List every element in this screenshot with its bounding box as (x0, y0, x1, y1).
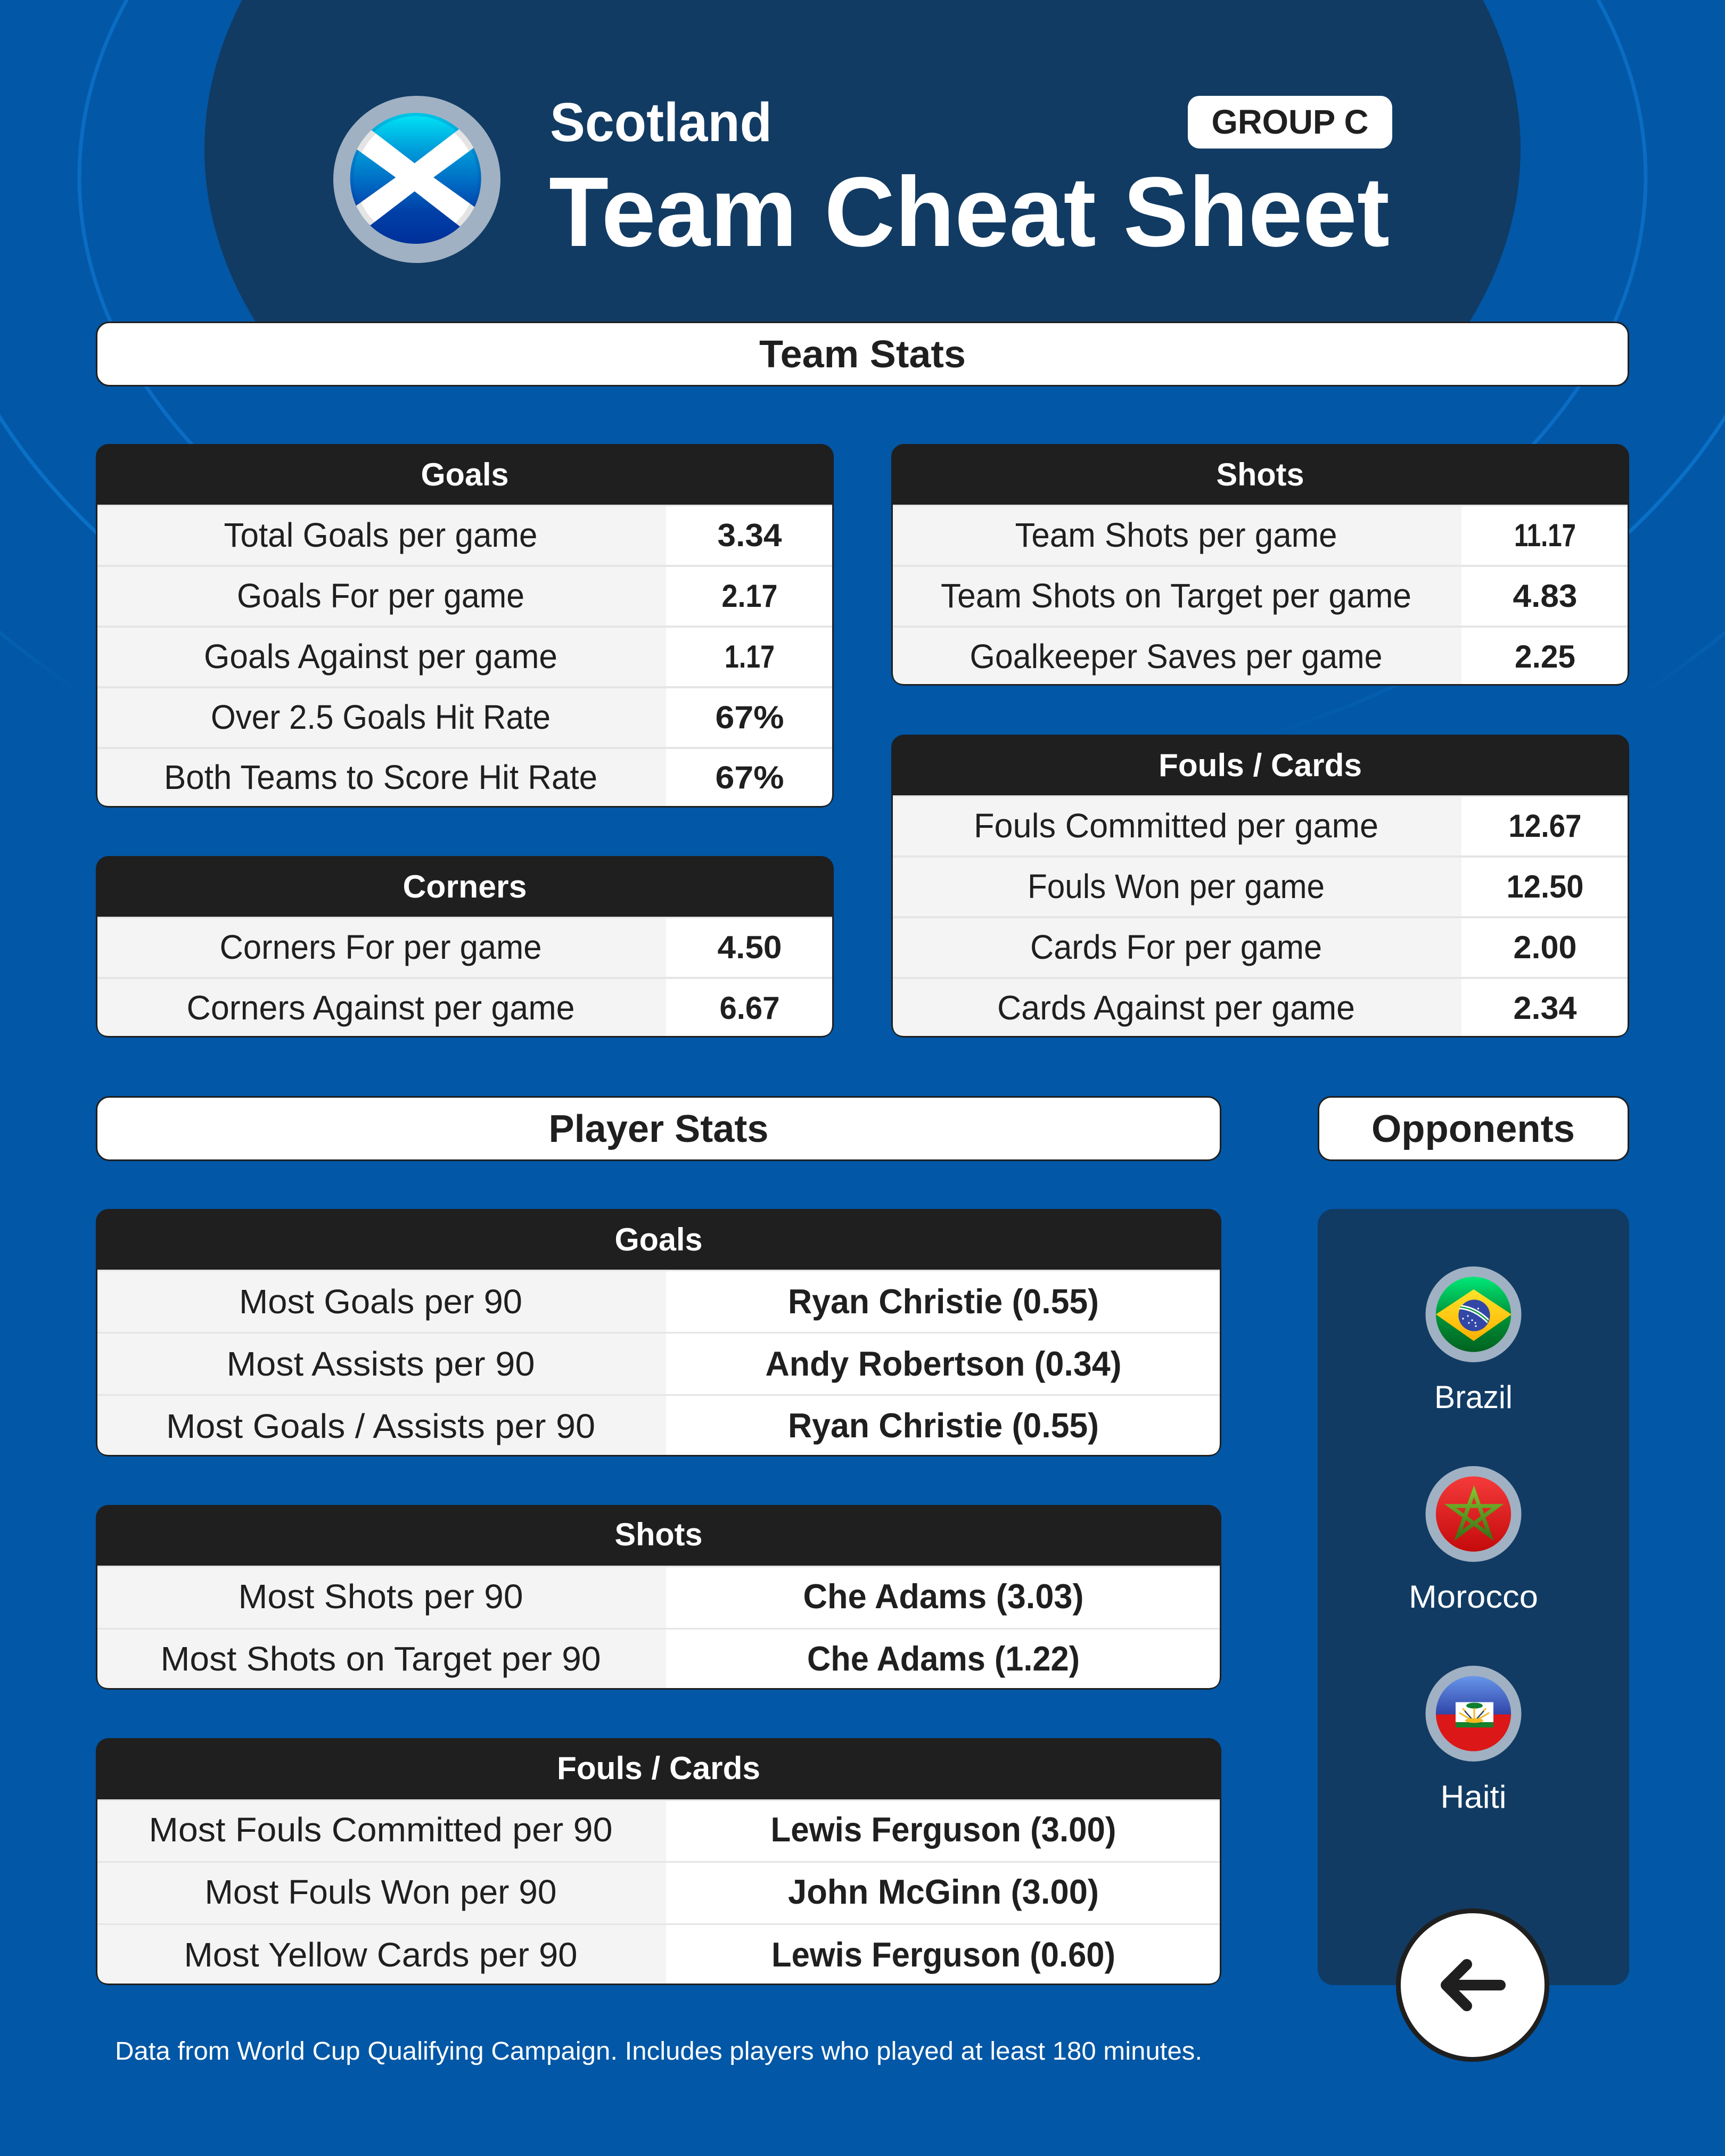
row (1028, 867, 1583, 906)
row: Ryan Christie (0.55) (788, 1282, 1099, 1321)
row: 2.00 (1513, 929, 1577, 965)
heading: Fouls / Cards (1159, 747, 1362, 783)
row (211, 698, 784, 736)
row (149, 1810, 1116, 1849)
row (219, 928, 782, 966)
row: 4.83 (1513, 578, 1577, 614)
icon: Morocco flag (1426, 1466, 1522, 1562)
row: Lewis Ferguson (0.60) (771, 1935, 1115, 1974)
icon: back arrow button (1398, 1911, 1547, 2059)
row: John McGinn (3.00) (788, 1872, 1099, 1911)
row: Team Shots on Target per game (941, 577, 1411, 615)
icon: Brazil flag (1426, 1266, 1522, 1362)
row: Cards For per game (1030, 928, 1322, 966)
row: 1.17 (725, 639, 775, 674)
row: Corners Against per game (186, 989, 575, 1027)
row (1030, 928, 1577, 966)
background rings (0, 0, 1725, 907)
section heading: Team Stats (97, 323, 1628, 385)
panel: player shots (96, 1505, 1221, 1690)
panel: opponents (1318, 1209, 1629, 1985)
icon: Scotland flag badge (333, 96, 500, 263)
row (166, 1406, 1099, 1445)
row: 12.67 (1509, 808, 1581, 844)
row: Most Shots per 90 (239, 1577, 523, 1616)
row: Team Shots per game (1015, 516, 1337, 554)
row: Over 2.5 Goals Hit Rate (211, 698, 551, 736)
row: Goalkeeper Saves per game (970, 637, 1382, 676)
row (204, 637, 775, 676)
row: Lewis Ferguson (3.00) (771, 1810, 1116, 1849)
row: 67% (716, 700, 784, 735)
row: 3.34 (718, 517, 782, 553)
row (186, 989, 779, 1027)
row (161, 1639, 1080, 1678)
header backdrop ellipse (204, 0, 1521, 322)
row: 67% (716, 760, 784, 795)
row: Fouls Committed per game (974, 807, 1378, 845)
row: Most Yellow Cards per 90 (184, 1936, 577, 1974)
row (974, 807, 1581, 845)
row (1015, 516, 1576, 554)
section heading: Opponents: Opponents (1371, 1108, 1575, 1150)
panel: player fouls and cards (96, 1738, 1221, 1985)
row: Most Assists per 90 (227, 1345, 535, 1383)
row: Most Shots on Target per 90 (161, 1640, 601, 1678)
row: 2.25 (1515, 639, 1575, 674)
row: Both Teams to Score Hit Rate (164, 758, 597, 796)
row: 6.67 (720, 990, 779, 1026)
label: Brazil: Brazil (1434, 1379, 1513, 1415)
row (997, 989, 1577, 1027)
heading: Fouls / Cards (557, 1750, 760, 1786)
panel: player goals (96, 1209, 1221, 1456)
row: Cards Against per game (997, 989, 1355, 1027)
label: Morocco: Morocco (1409, 1579, 1538, 1615)
section heading: Team Stats: Team Stats (759, 333, 966, 376)
row: 11.17 (1514, 517, 1576, 553)
panel: team corners (96, 856, 834, 1038)
heading: Shots (614, 1517, 703, 1552)
badge: Group C (1188, 96, 1392, 149)
heading: Corners (402, 869, 527, 904)
heading: Goals (421, 457, 509, 492)
subtitle: Scotland: Scotland (550, 92, 772, 153)
badge: Group C: GROUP C (1212, 103, 1368, 141)
section heading: Player Stats (97, 1097, 1220, 1161)
row: Total Goals per game (224, 516, 538, 554)
title: Team Cheat Sheet (549, 157, 1390, 267)
row (184, 1935, 1115, 1974)
row: Corners For per game (219, 928, 542, 966)
row: Ryan Christie (0.55) (788, 1406, 1099, 1445)
row (239, 1282, 1099, 1321)
row: 2.34 (1513, 990, 1577, 1026)
row: Andy Robertson (0.34) (766, 1344, 1121, 1383)
section heading: Player Stats: Player Stats (548, 1108, 769, 1150)
row (239, 1577, 1084, 1616)
row: 12.50 (1507, 869, 1583, 904)
panel: team fouls and cards (891, 735, 1629, 1038)
row (237, 577, 777, 615)
footnote: Data from World Cup Qualifying Campaign. Includes players who played at least 180 minutes. (115, 2037, 1202, 2066)
icon: Haiti flag (1426, 1666, 1522, 1762)
row (204, 1872, 1099, 1911)
panel: team shots (891, 444, 1629, 686)
row: Most Fouls Committed per 90 (149, 1811, 612, 1849)
row: 4.50 (718, 929, 782, 965)
label: Haiti: Haiti (1441, 1779, 1507, 1815)
row: Che Adams (1.22) (807, 1639, 1080, 1678)
row (227, 1344, 1121, 1383)
section heading: Opponents (1318, 1097, 1628, 1161)
row: Goals For per game (237, 577, 524, 615)
row: Fouls Won per game (1028, 867, 1325, 906)
row (224, 516, 782, 554)
heading: Shots (1216, 457, 1304, 492)
row: Most Fouls Won per 90 (204, 1873, 557, 1911)
row: Che Adams (3.03) (803, 1577, 1084, 1616)
panel: team goals (96, 444, 834, 808)
row: Most Goals / Assists per 90 (166, 1407, 595, 1445)
heading: Goals (614, 1222, 703, 1257)
row: 2.17 (722, 578, 777, 614)
row: Goals Against per game (204, 637, 557, 676)
row: Most Goals per 90 (239, 1282, 522, 1321)
